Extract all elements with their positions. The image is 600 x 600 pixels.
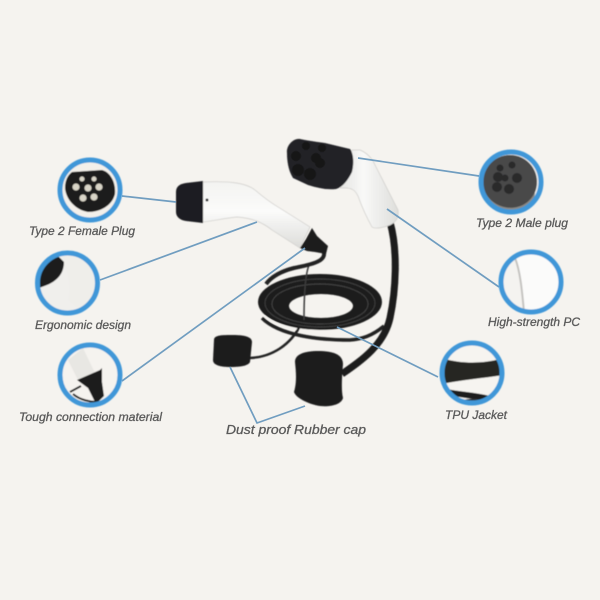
callout: Type 2 Male plug — [476, 152, 568, 230]
callout lines — [100, 158, 499, 423]
icon: male socket — [481, 152, 541, 212]
infographic canvas — [20, 138, 580, 437]
line: high-strength — [387, 209, 499, 287]
line: female plug — [122, 196, 176, 202]
cable from female plug — [266, 250, 324, 284]
icon: plug grip — [36, 252, 100, 315]
icon: female socket — [60, 160, 120, 220]
female strain relief — [300, 228, 328, 254]
callout: High-strength PC — [488, 252, 580, 329]
male plug body — [340, 150, 398, 228]
callout: Type 2 Female Plug — [29, 160, 135, 238]
icon: strain relief — [60, 345, 120, 405]
line: ergonomic — [100, 222, 257, 280]
label: Type 2 Male plug — [476, 216, 568, 230]
product: charging cable with plugs — [176, 139, 398, 406]
label: TPU Jacket — [445, 408, 508, 422]
label: Dust proof Rubber cap: Dust proof Rubber cap — [226, 422, 366, 437]
icon: cable jacket — [442, 343, 503, 406]
female plug body — [203, 182, 310, 248]
large dust cap — [294, 351, 343, 406]
line: male plug — [358, 158, 479, 176]
callout: Ergonomic design — [35, 252, 131, 332]
callout: Tough connection material — [19, 345, 162, 424]
label: Type 2 Female Plug — [29, 224, 135, 238]
line: dust caps — [230, 367, 305, 423]
cable to male plug and cap — [342, 222, 395, 374]
line: TPU jacket — [337, 327, 438, 377]
label: High-strength PC — [488, 315, 580, 329]
male plug sockets — [291, 142, 326, 180]
label: Ergonomic design — [35, 318, 131, 332]
male plug head — [287, 139, 353, 189]
callout: TPU Jacket — [442, 343, 508, 422]
wire to small cap — [250, 326, 300, 358]
cable coil — [258, 263, 384, 340]
label: Tough connection material — [19, 410, 162, 424]
icon: white shell — [501, 252, 562, 312]
female plug collar — [176, 181, 203, 223]
line: tough connection — [122, 248, 305, 381]
small dust cap — [213, 335, 252, 367]
